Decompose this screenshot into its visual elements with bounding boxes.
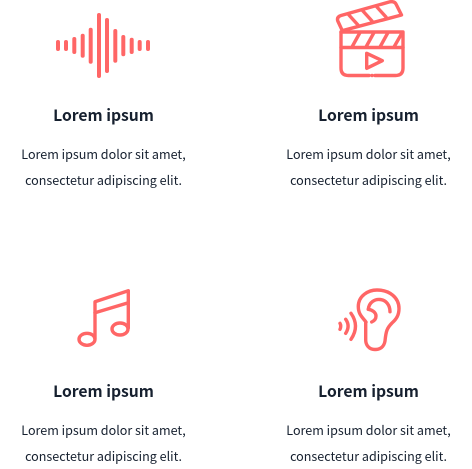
icon: ear with sound waves	[340, 290, 399, 350]
heading: bottom left: Lorem ipsum	[53, 379, 154, 402]
text: top left	[21, 144, 186, 189]
heading: bottom right: Lorem ipsum	[318, 379, 419, 402]
icon: sound waveform	[58, 15, 148, 76]
text: top right: Lorem ipsum dolor sit amet,	[286, 144, 451, 163]
text: top left: Lorem ipsum dolor sit amet,	[21, 144, 186, 163]
text: bottom right: consectetur adipiscing elit.	[290, 446, 447, 465]
text: top right	[286, 144, 451, 189]
text: bottom left	[21, 420, 186, 465]
text: top left: consectetur adipiscing elit.	[25, 170, 182, 189]
text: bottom left: Lorem ipsum dolor sit amet,	[21, 420, 186, 439]
text: top right: consectetur adipiscing elit.	[290, 170, 447, 189]
icon: film clapperboard	[338, 2, 403, 76]
text: bottom right: Lorem ipsum dolor sit amet,	[286, 420, 451, 439]
text: bottom right	[286, 420, 451, 465]
text: bottom left: consectetur adipiscing elit.	[25, 446, 182, 465]
heading: top left: Lorem ipsum	[53, 103, 154, 126]
icon: music notes	[79, 291, 128, 345]
heading: top right: Lorem ipsum	[318, 103, 419, 126]
